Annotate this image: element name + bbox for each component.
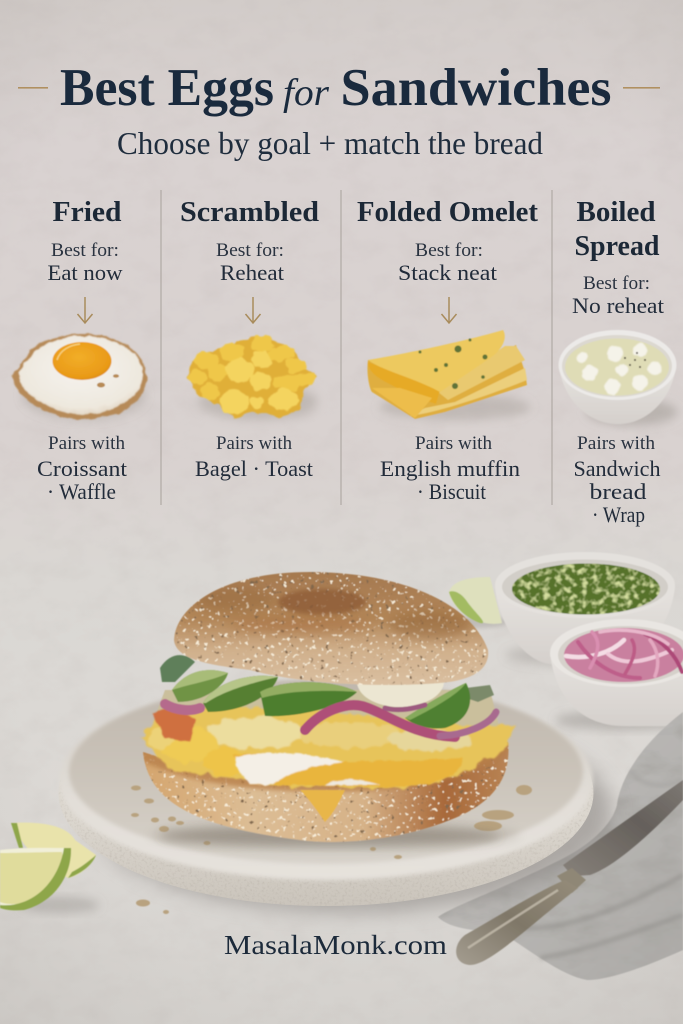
knife: bolster — [557, 868, 586, 893]
icon: folded omelet — [367, 330, 531, 420]
text: pairs with: Pairs with — [216, 434, 292, 454]
footer: site url: MasalaMonk.com — [224, 930, 447, 960]
text: best for stack neat: Stack neat — [398, 260, 497, 285]
illustration: bagel egg sandwich — [140, 568, 515, 847]
panel: Fried — [12, 197, 147, 504]
icon: egg salad bowl — [558, 330, 678, 425]
sandwich: fried egg and melted cheese — [233, 753, 463, 787]
text: best for no reheat: No reheat — [572, 293, 664, 318]
lime: front wedge — [0, 848, 71, 910]
omelet: underside fold — [368, 362, 440, 404]
title: left ornament rule — [18, 87, 48, 89]
text: pairs with: Pairs with — [48, 434, 125, 454]
knife: handle — [456, 880, 578, 965]
sandwich: lettuce — [160, 655, 494, 702]
sandwich: bottom bagel half — [142, 742, 509, 842]
text: pairs with: · Biscuit — [417, 479, 486, 504]
text: best for stack neat: Best for: — [415, 240, 483, 261]
icon: lime wedge behind bowls — [448, 577, 508, 628]
title — [18, 59, 660, 117]
heading: Folded Omelet: Folded Omelet — [357, 197, 539, 228]
panel: Folded Omelet — [357, 197, 539, 504]
panel: Boiled Spread — [558, 197, 678, 527]
heading: Boiled Spread: Spread — [574, 231, 660, 262]
sandwich: left red onion — [165, 704, 200, 710]
title: Best Eggs: Best Eggs — [60, 59, 274, 117]
icon: lime wedges — [0, 823, 100, 913]
text: pairs with: English muffin — [380, 456, 520, 481]
arrow: down — [78, 297, 92, 323]
lime: back wedge — [11, 823, 96, 878]
heading: Boiled Spread — [574, 197, 660, 262]
panel: Scrambled — [180, 197, 319, 481]
lime: shadow — [20, 897, 100, 913]
text: best for eat now: Best for: — [51, 240, 119, 261]
text: best for eat now: Eat now — [48, 260, 123, 285]
sandwich: scrambled egg layer — [141, 707, 515, 788]
sandwich: top bagel half with seeds — [170, 568, 494, 690]
icon: knife — [456, 780, 683, 965]
text: pairs with — [195, 434, 313, 481]
arrow: down — [246, 297, 260, 323]
title: Sandwiches: Sandwiches — [340, 59, 612, 117]
title: right ornament rule — [623, 87, 660, 89]
omelet: top flap — [368, 330, 505, 392]
text: pairs with: Bagel · Toast — [195, 456, 313, 481]
sandwich: tomato slice — [153, 709, 196, 742]
sandwich: mayo spread — [357, 681, 444, 707]
icon: fried egg — [12, 334, 147, 420]
text: pairs with: Croissant — [37, 456, 127, 481]
text: pairs with — [574, 434, 660, 527]
omelet: bottom layers — [367, 345, 527, 419]
text: pairs with: · Waffle — [47, 479, 116, 504]
text: best for no reheat: Best for: — [583, 273, 650, 294]
crumbs on plate — [131, 785, 532, 914]
column dividers — [161, 190, 552, 505]
text: pairs with — [380, 434, 520, 504]
heading: Fried: Fried — [52, 197, 122, 228]
knife: blade — [563, 780, 683, 876]
arrow: down — [442, 297, 456, 323]
text: pairs with: Pairs with — [415, 434, 492, 454]
text: pairs with: · Wrap — [592, 502, 645, 527]
heading: Boiled Spread: Boiled — [576, 197, 656, 228]
icon: pickled onion bowl — [550, 619, 683, 730]
text: pairs with: Sandwich — [574, 456, 660, 481]
icon: green relish bowl — [495, 552, 675, 667]
plate — [58, 680, 612, 912]
text: best for reheat: Best for: — [216, 240, 284, 261]
subtitle: Choose by goal + match the bread — [117, 125, 543, 161]
sandwich: contact shadow — [160, 826, 500, 846]
sandwich: avocado slices — [172, 670, 470, 729]
heading: Scrambled: Scrambled — [180, 197, 319, 228]
sandwich: filling base — [150, 690, 500, 730]
text: best for reheat — [216, 240, 284, 285]
text: pairs with — [37, 434, 127, 504]
text: pairs with: bread — [590, 479, 646, 504]
text: best for stack neat — [398, 240, 497, 285]
text: best for no reheat — [572, 273, 664, 318]
text: pairs with: Pairs with — [577, 434, 655, 454]
text: best for reheat: Reheat — [220, 260, 284, 285]
sandwich: red onion ribbons — [305, 705, 496, 737]
title: for: for — [283, 72, 329, 114]
text: best for eat now — [48, 240, 123, 285]
napkin — [438, 712, 683, 980]
icon: scrambled eggs — [186, 335, 318, 420]
